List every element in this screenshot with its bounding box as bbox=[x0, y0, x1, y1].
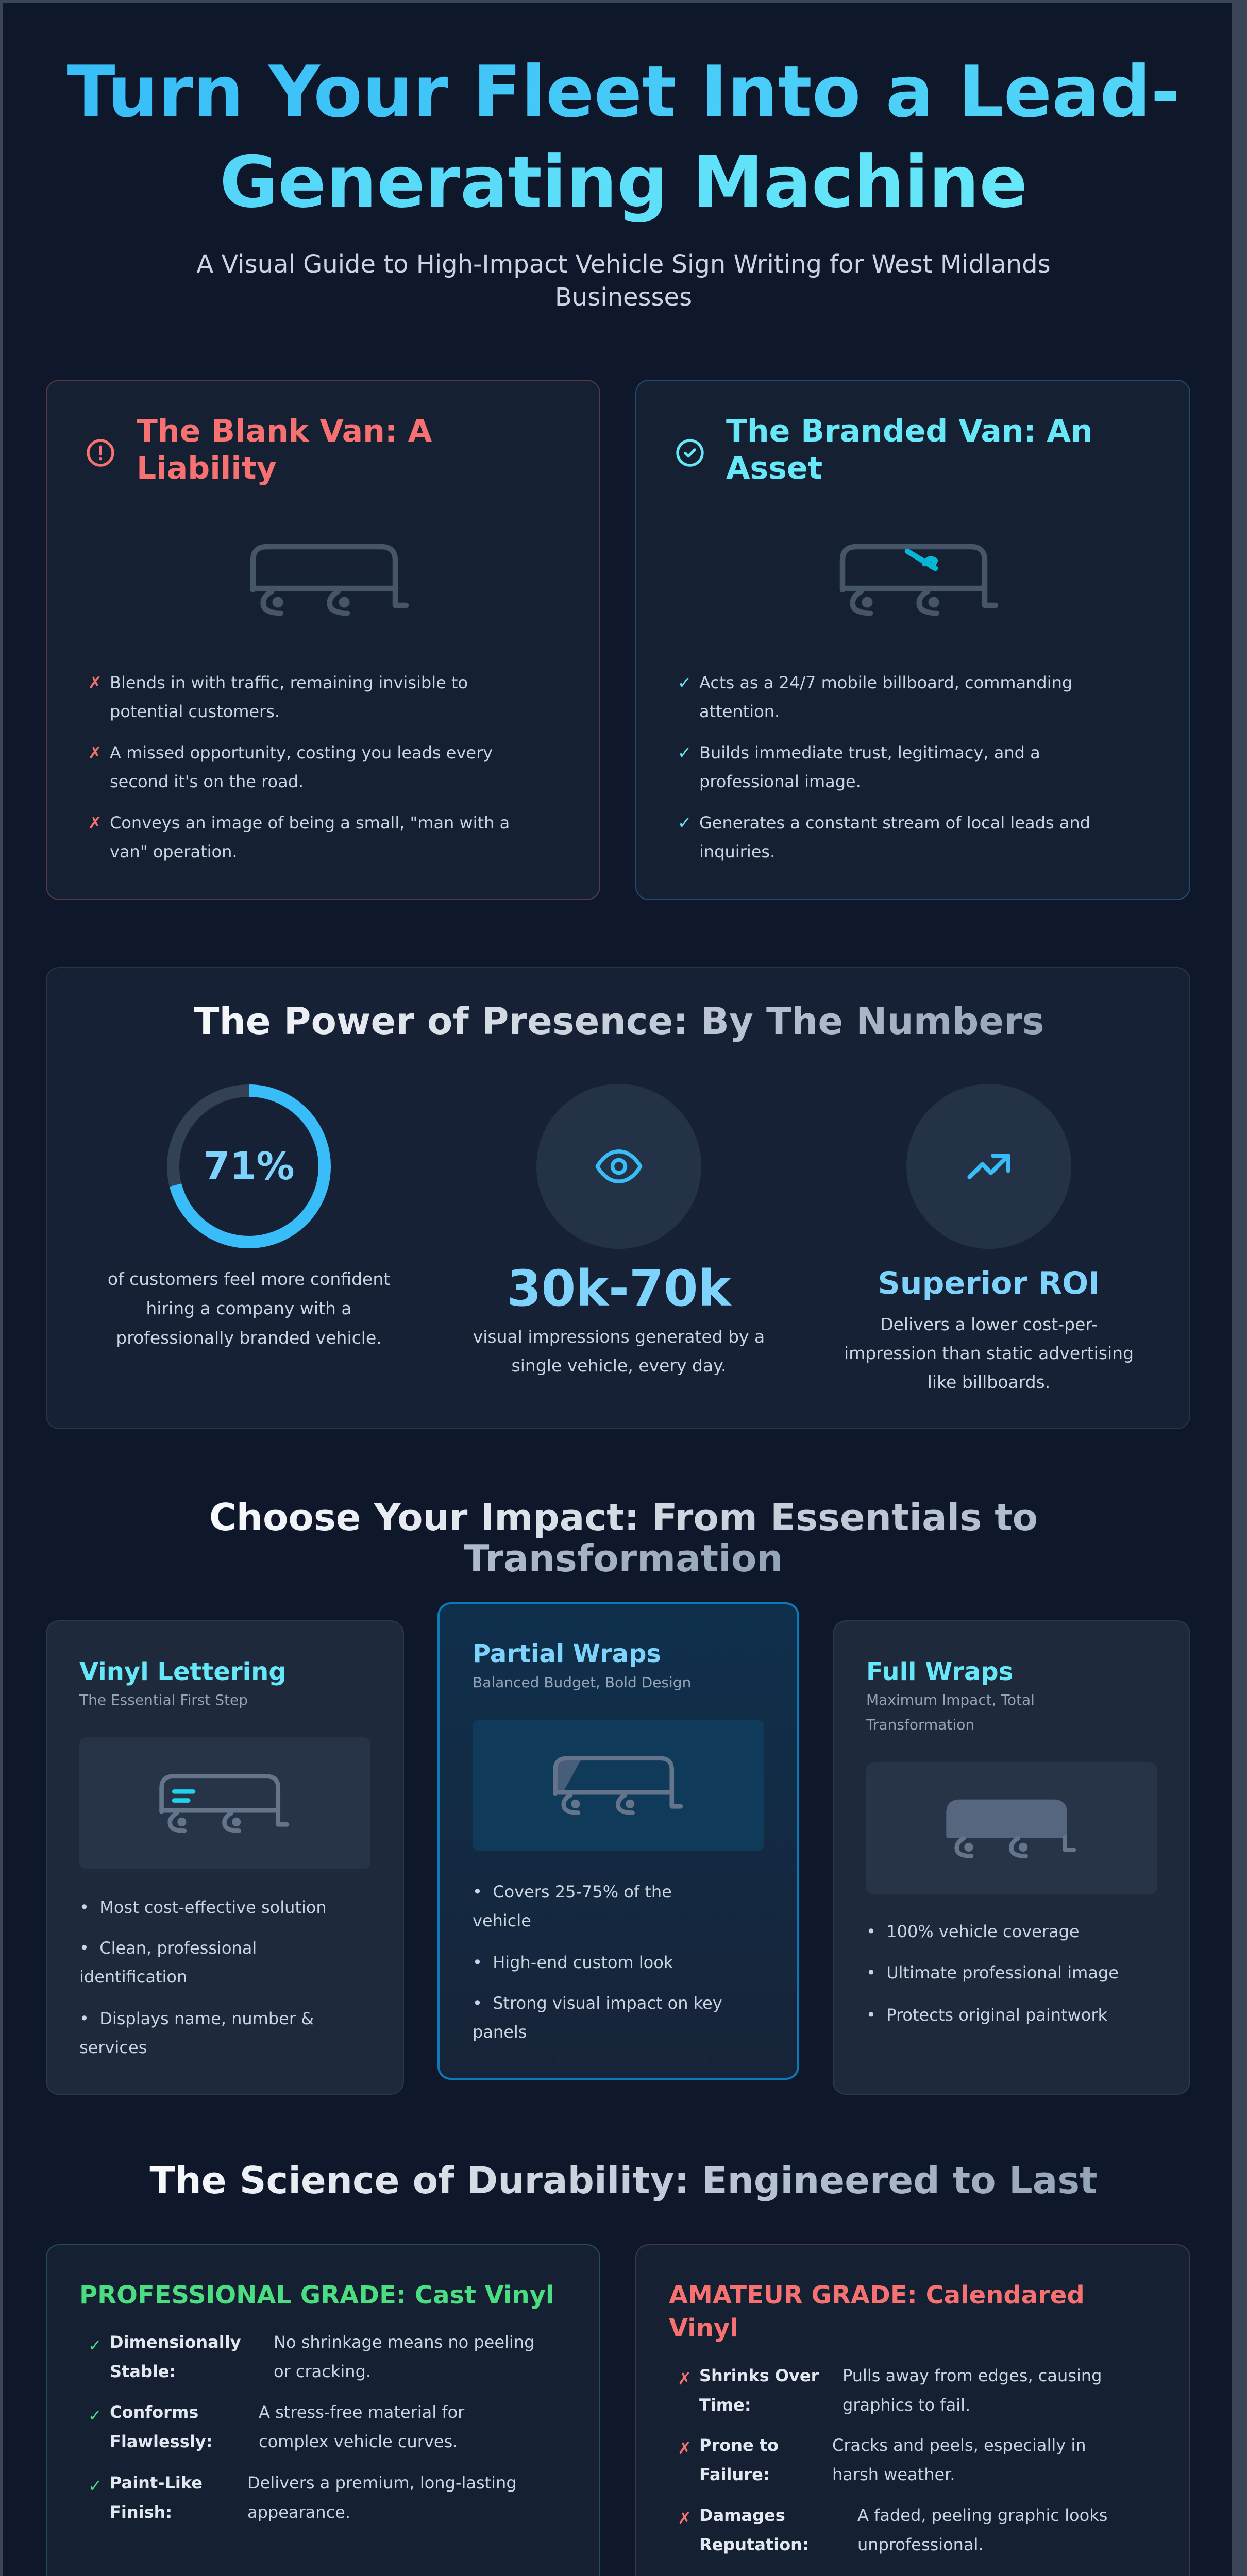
panel: vinyl lettering: • Displays name, number & bbox=[79, 2009, 314, 2028]
panel: blank van: ✗ bbox=[88, 813, 102, 833]
heading: choose your impact: Transformation bbox=[464, 1537, 783, 1580]
panel: professional grade: Stable: bbox=[110, 2362, 176, 2381]
panel: blank van: ✗ bbox=[88, 673, 102, 692]
heading: blank van: Liability bbox=[137, 450, 277, 486]
panel: branded van: ✓ bbox=[678, 743, 692, 762]
text: impressions caption: single vehicle, every day. bbox=[512, 1355, 726, 1376]
panel: amateur grade: ✗ bbox=[678, 2438, 692, 2458]
panel: amateur grade: Pulls away from edges, causing bbox=[842, 2366, 1102, 2385]
heading: branded van: The Branded Van: An bbox=[726, 413, 1093, 449]
panel: full wraps: • Protects original paintwork bbox=[866, 2005, 1107, 2025]
icon box: full van bbox=[866, 1762, 1157, 1894]
icon: warning circle bbox=[87, 439, 114, 467]
icon box: lettered van bbox=[79, 1737, 370, 1869]
text: 71% caption: of customers feel more confident bbox=[108, 1269, 390, 1289]
subheading: Maximum Impact, Total bbox=[866, 1691, 1035, 1708]
list: professional benefits bbox=[47, 2327, 601, 2328]
subheading: The Essential First Step bbox=[79, 1691, 248, 1708]
panel: amateur grade: Prone to bbox=[699, 2435, 779, 2455]
panel: amateur grade: ✗ bbox=[678, 2369, 692, 2388]
panel: branded van: inquiries. bbox=[699, 842, 775, 861]
panel: amateur grade: unprofessional. bbox=[857, 2535, 984, 2554]
heading: amateur grade: Vinyl bbox=[669, 2314, 738, 2343]
heading: blank van bbox=[137, 413, 432, 486]
heading: branded van: Asset bbox=[726, 450, 822, 486]
panel: professional grade: or cracking. bbox=[274, 2362, 371, 2381]
panel: partial wraps bbox=[437, 1602, 799, 2080]
panel: professional grade: ✓ bbox=[88, 2405, 102, 2425]
text: 71% caption: professionally branded vehicle. bbox=[116, 1328, 382, 1348]
panel: blank van: ✗ bbox=[88, 743, 102, 762]
panel: professional grade bbox=[46, 2244, 600, 2576]
panel: blank van: A missed opportunity, costing you leads every bbox=[110, 743, 493, 762]
stat: 30k-70k: 30k-70k bbox=[507, 1260, 731, 1317]
panel: professional grade: Paint-Like bbox=[110, 2473, 203, 2493]
heading: power of presence: The Power of Presence: By The Numbers bbox=[194, 999, 1044, 1043]
heading: choose your impact: Choose Your Impact: From Essentials to bbox=[209, 1496, 1038, 1539]
bullets: vinyl: • Most cost-effective solution bbox=[79, 1897, 327, 1917]
title bbox=[66, 50, 1181, 224]
panel: amateur grade: Shrinks Over bbox=[699, 2366, 819, 2385]
subtitle: A Visual Guide to High-Impact Vehicle Sign Writing for West Midlands bbox=[196, 250, 1051, 279]
panel: full wraps bbox=[833, 1620, 1190, 2095]
subheading bbox=[866, 1688, 1035, 1737]
panel: branded van: Generates a constant stream of local leads and bbox=[699, 813, 1090, 833]
panel: amateur grade: Cracks and peels, especially in bbox=[832, 2435, 1086, 2455]
panel: vinyl lettering bbox=[46, 1620, 404, 2095]
panel: branded van: Builds immediate trust, legitimacy, and a bbox=[699, 743, 1040, 762]
panel: professional grade: Flawlessly: bbox=[110, 2432, 212, 2451]
panel: amateur grade: harsh weather. bbox=[832, 2465, 955, 2484]
panel: partial wraps: panels bbox=[473, 2022, 527, 2042]
panel: vinyl lettering: services bbox=[79, 2038, 147, 2057]
panel: partial wraps: • Strong visual impact on key bbox=[473, 1993, 722, 2013]
panel: amateur grade: Damages bbox=[699, 2505, 785, 2525]
icon box: partial van bbox=[473, 1720, 764, 1851]
bullets: assets bbox=[678, 673, 1090, 861]
title: Generating Machine bbox=[220, 141, 1027, 224]
panel: blank van bbox=[46, 380, 600, 900]
panel: amateur grade: ✗ bbox=[678, 2509, 692, 2528]
bullets: full: • 100% vehicle coverage bbox=[866, 1922, 1080, 1941]
panel: professional grade: Delivers a premium, long-lasting bbox=[247, 2473, 517, 2493]
text: impressions caption: visual impressions generated by a bbox=[473, 1327, 765, 1347]
panel: amateur grade bbox=[635, 2244, 1190, 2576]
panel: professional grade: No shrinkage means no peeling bbox=[274, 2332, 534, 2352]
panel: amateur grade: Time: bbox=[699, 2395, 751, 2415]
panel: professional grade: Conforms bbox=[110, 2402, 198, 2422]
heading: vinyl lettering: Vinyl Lettering bbox=[79, 1657, 287, 1686]
heading: full wraps: Full Wraps bbox=[866, 1657, 1013, 1686]
title: Turn Your Fleet Into a Lead- bbox=[66, 50, 1181, 133]
list: amateur problems bbox=[636, 2361, 1191, 2362]
panel: blank van: Conveys an image of being a small, "man with a bbox=[110, 813, 510, 833]
text: 71% caption bbox=[108, 1269, 390, 1348]
panel: vinyl lettering: • Clean, professional bbox=[79, 1938, 257, 1958]
heading: partial wraps: Partial Wraps bbox=[473, 1639, 661, 1668]
panel: branded van: Acts as a 24/7 mobile billboard, commanding bbox=[699, 673, 1072, 692]
panel: amateur grade: Reputation: bbox=[699, 2535, 809, 2554]
panel: stats bbox=[46, 967, 1190, 1429]
bullets: liabilities bbox=[88, 673, 510, 861]
heading: blank van: The Blank Van: A bbox=[137, 413, 432, 449]
panel: blank van: van" operation. bbox=[110, 842, 238, 861]
panel: branded van bbox=[635, 380, 1190, 900]
icon: check circle bbox=[676, 439, 704, 467]
panel: amateur grade: graphics to fail. bbox=[842, 2395, 970, 2415]
heading: choose your impact bbox=[209, 1496, 1038, 1580]
text: ROI caption: Delivers a lower cost-per- bbox=[880, 1314, 1098, 1334]
subtitle bbox=[196, 250, 1051, 312]
text: 71% caption: hiring a company with a bbox=[146, 1298, 352, 1318]
text: impressions caption bbox=[473, 1327, 765, 1376]
bullets: partial: vehicle bbox=[473, 1911, 531, 1930]
panel: professional grade: ✓ bbox=[88, 2335, 102, 2355]
text: ROI caption: impression than static advertising bbox=[844, 1343, 1134, 1363]
panel: vinyl lettering: identification bbox=[79, 1967, 187, 1987]
panel: branded van: ✓ bbox=[678, 673, 692, 692]
stat: 71% donut bbox=[167, 1084, 331, 1248]
heading: science of durability: The Science of Durability: Engineered to Last bbox=[149, 2159, 1098, 2202]
panel: blank van: potential customers. bbox=[110, 702, 280, 721]
panel: professional grade: Dimensionally bbox=[110, 2332, 241, 2352]
panel: professional grade: ✓ bbox=[88, 2476, 102, 2496]
heading: branded van bbox=[726, 413, 1093, 486]
subtitle: Businesses bbox=[555, 283, 692, 312]
bullets: partial: • Covers 25-75% of the bbox=[473, 1882, 672, 1902]
panel: partial wraps: • High-end custom look bbox=[473, 1953, 673, 1972]
heading: amateur grade bbox=[669, 2279, 1085, 2345]
icon: branded van bbox=[840, 544, 999, 616]
panel: blank van: Blends in with traffic, remaining invisible to bbox=[110, 673, 468, 692]
heading: professional grade: PROFESSIONAL GRADE: Cast Vinyl bbox=[79, 2281, 554, 2310]
panel: full wraps: • Ultimate professional image bbox=[866, 1963, 1119, 1982]
panel: professional grade: appearance. bbox=[247, 2502, 350, 2522]
icon: plain van bbox=[250, 544, 409, 616]
panel: professional grade: complex vehicle curves. bbox=[259, 2432, 458, 2451]
text: ROI caption: like billboards. bbox=[928, 1372, 1050, 1392]
icon: eye circle bbox=[536, 1084, 701, 1249]
panel: professional grade: A stress-free material for bbox=[259, 2402, 464, 2422]
heading: amateur grade: AMATEUR GRADE: Calendared bbox=[669, 2281, 1085, 2310]
panel: branded van: attention. bbox=[699, 702, 780, 721]
stat: 71% donut: 71% bbox=[203, 1144, 295, 1189]
panel: professional grade: Finish: bbox=[110, 2502, 172, 2522]
panel: blank van: second it's on the road. bbox=[110, 772, 304, 791]
panel: branded van: professional image. bbox=[699, 772, 861, 791]
subheading: Transformation bbox=[866, 1716, 974, 1733]
stat: superior ROI: Superior ROI bbox=[878, 1265, 1100, 1301]
icon: trend circle bbox=[906, 1084, 1071, 1249]
panel: branded van: ✓ bbox=[678, 813, 692, 833]
panel: amateur grade: Failure: bbox=[699, 2465, 770, 2484]
bullets: partial bbox=[473, 1882, 672, 1930]
text: ROI caption bbox=[844, 1314, 1134, 1392]
subheading: Balanced Budget, Bold Design bbox=[473, 1674, 691, 1691]
panel: amateur grade: A faded, peeling graphic looks bbox=[857, 2505, 1107, 2525]
